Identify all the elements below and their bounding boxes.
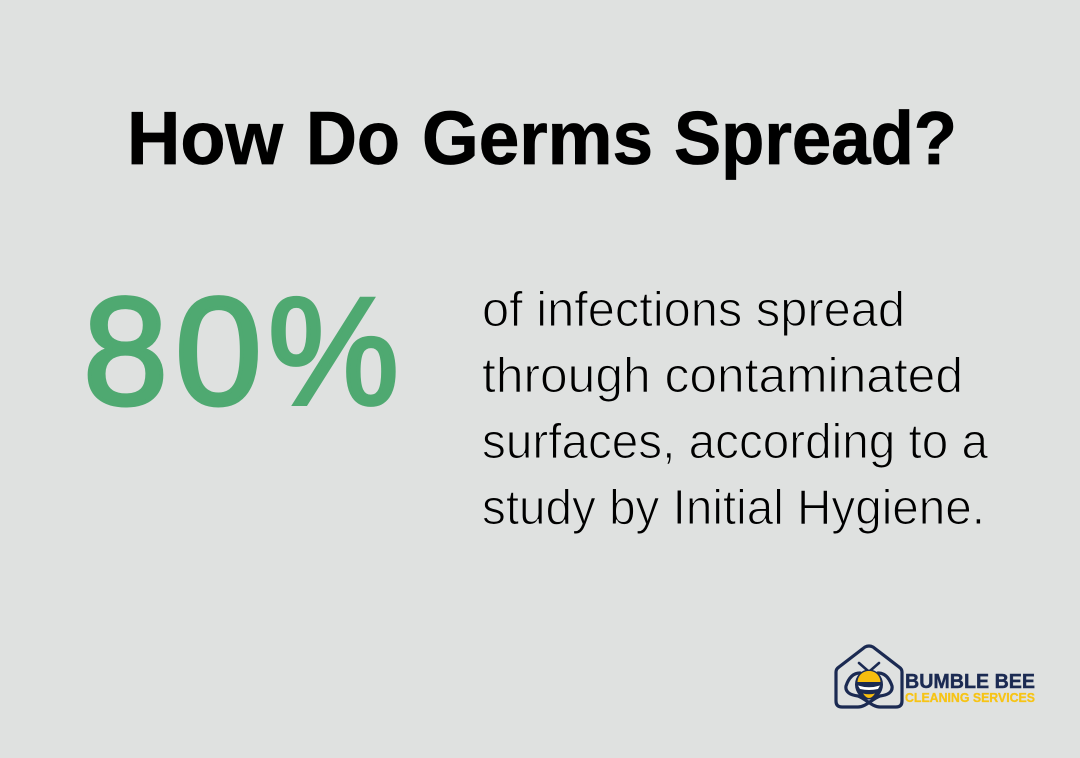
big statistic: 80%: % bbox=[268, 266, 399, 437]
big statistic: 80%: 8 bbox=[83, 266, 168, 437]
big statistic: 80%: 0 bbox=[175, 266, 262, 437]
big statistic: 80% bbox=[83, 266, 399, 437]
title: Do bbox=[306, 96, 400, 180]
statistic description text: surfaces, according to a bbox=[482, 415, 989, 469]
logo tagline: CLEANING SERVICES bbox=[905, 690, 1035, 705]
statistic description text: through contaminated bbox=[482, 349, 963, 403]
title: How bbox=[127, 96, 284, 180]
title bbox=[127, 96, 957, 180]
statistic description text bbox=[482, 283, 989, 535]
title: Germs bbox=[422, 96, 653, 180]
logo: Bumble Bee Cleaning Services bbox=[836, 646, 1035, 707]
statistic description text: of infections spread bbox=[482, 283, 905, 337]
statistic description text: study by Initial Hygiene. bbox=[482, 481, 985, 535]
logo name: BUMBLE BEE bbox=[905, 671, 1035, 693]
icon: house with bee bbox=[836, 646, 902, 707]
title: Spread? bbox=[674, 96, 957, 180]
